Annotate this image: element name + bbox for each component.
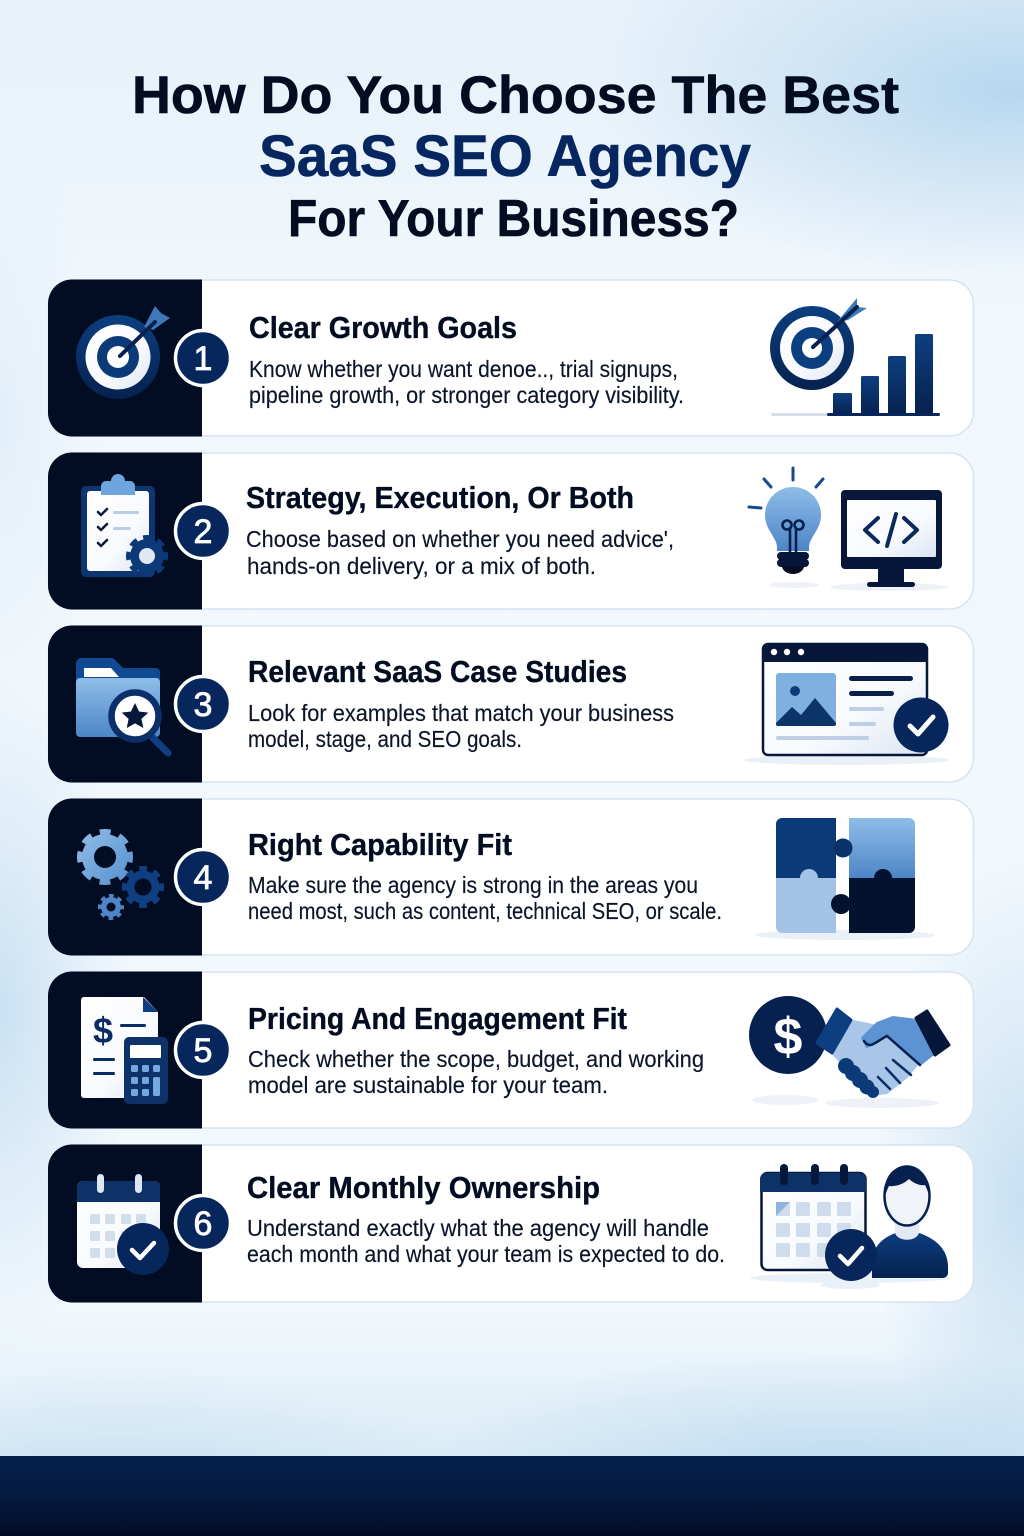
step number 6 <box>176 1196 230 1250</box>
panel: card 4 right capability fit <box>48 798 974 956</box>
step number 4: 4 <box>194 859 212 897</box>
description: Look for examples that match your business <box>248 700 674 726</box>
heading: Pricing And Engagement Fit <box>248 1001 627 1036</box>
panel: card 5 pricing and engagement fit <box>48 972 974 1128</box>
icon: folder with magnifier star <box>76 658 168 753</box>
heading: Right Capability Fit <box>248 827 512 862</box>
step number 5 <box>176 1022 230 1078</box>
step number 1 <box>176 330 230 386</box>
description: model, stage, and SEO goals. <box>248 726 522 752</box>
icon: invoice and calculator <box>81 997 168 1104</box>
description: Choose based on whether you need advice', <box>246 526 674 552</box>
icon: dollar coin <box>749 996 827 1105</box>
description: Check whether the scope, budget, and working <box>248 1046 704 1072</box>
icon: handshake <box>817 1009 949 1108</box>
description: Understand exactly what the agency will handle <box>247 1215 709 1241</box>
description: Make sure the agency is strong in the areas you <box>248 872 698 898</box>
panel: card 6 clear monthly ownership <box>48 1144 974 1302</box>
heading: Relevant SaaS Case Studies <box>248 654 627 689</box>
icon: target and bar chart <box>770 298 940 416</box>
icon: three gears <box>80 832 161 918</box>
step number 1: 1 <box>194 340 212 378</box>
step number 2 <box>176 504 230 558</box>
icon: target with arrow <box>76 306 170 399</box>
description <box>248 872 722 924</box>
description: hands-on delivery, or a mix of both. <box>247 553 596 579</box>
footer band <box>0 1456 1024 1536</box>
heading: Strategy, Execution, Or Both <box>246 480 634 515</box>
description: pipeline growth, or stronger category visibility. <box>249 382 684 408</box>
description <box>248 1046 704 1098</box>
step number 4 <box>176 850 230 904</box>
icon: calendar with check <box>77 1174 169 1275</box>
icon: browser window with check <box>744 643 948 765</box>
step number 3: 3 <box>194 686 212 724</box>
heading: Clear Monthly Ownership <box>247 1170 600 1205</box>
icon: dollar coin: $ <box>774 1008 803 1066</box>
icon: invoice and calculator: $ <box>93 1010 113 1051</box>
icon: calendar with person <box>750 1164 950 1289</box>
title: SaaS SEO Agency <box>259 124 751 189</box>
description: need most, such as content, technical SEO, or scale. <box>248 898 722 924</box>
description: model are sustainable for your team. <box>248 1072 608 1098</box>
description: Know whether you want denoe.., trial signups, <box>249 356 678 382</box>
icon: monitor with code <box>830 490 948 591</box>
title: For Your Business? <box>288 190 739 248</box>
description <box>249 356 684 408</box>
description: each month and what your team is expected to do. <box>247 1241 725 1267</box>
panel: card 1 clear growth goals <box>48 280 974 436</box>
panel: card 3 relevant saas case studies <box>48 626 974 782</box>
description <box>246 526 674 579</box>
icon: puzzle pieces <box>755 818 935 940</box>
title <box>132 66 899 248</box>
description <box>248 700 674 752</box>
heading: Clear Growth Goals <box>249 310 517 345</box>
icon: light bulb <box>749 468 823 588</box>
step number 6: 6 <box>194 1205 212 1243</box>
description <box>247 1215 725 1267</box>
icon: clipboard checklist with gear <box>81 474 166 577</box>
panel: card 2 strategy execution or both <box>48 452 974 610</box>
step number 5: 5 <box>194 1032 212 1070</box>
step number 2: 2 <box>194 513 212 551</box>
step number 3 <box>176 676 230 732</box>
title: How Do You Choose The Best <box>132 66 899 125</box>
